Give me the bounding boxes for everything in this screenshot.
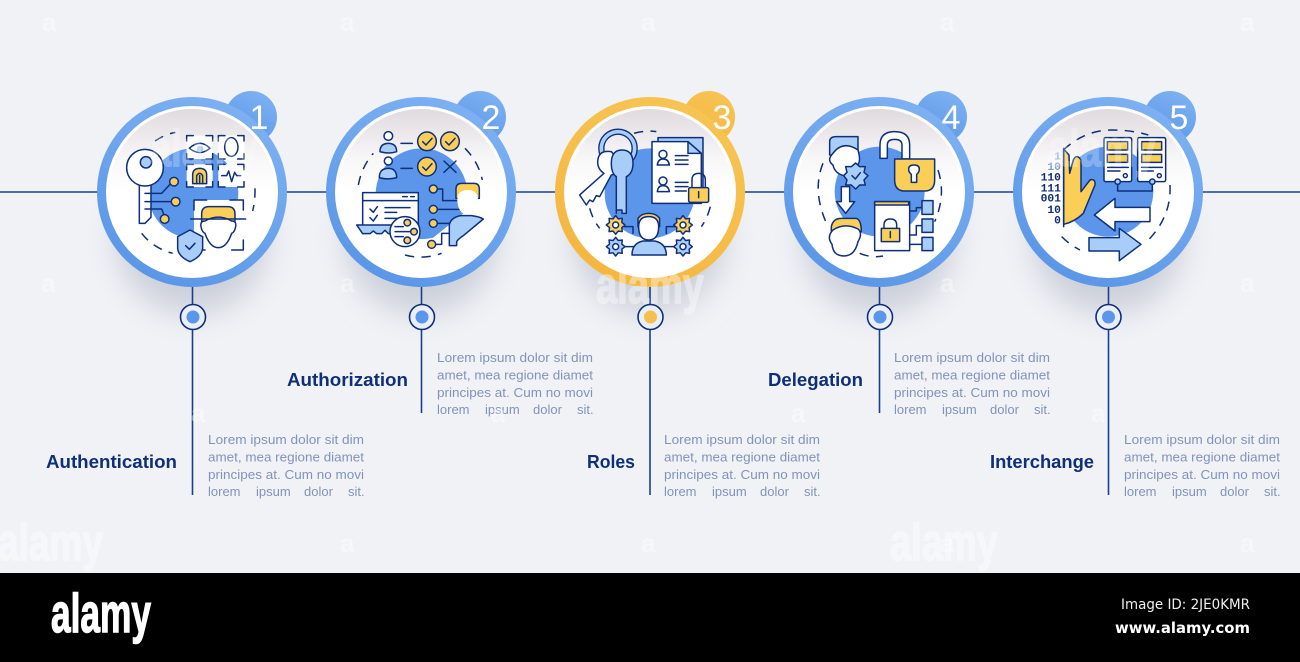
body text 5: sit. [1264, 484, 1281, 499]
body text 3: principes at. Cum no movi [664, 467, 820, 482]
ring 1 [97, 97, 287, 287]
timeline horizontal line [0, 191, 1300, 193]
watermarks: a [641, 528, 656, 558]
watermarks: alamy [1048, 120, 1156, 178]
watermarks: a [1091, 398, 1106, 428]
number 2: 2 [482, 99, 500, 137]
binary digits: 0 [1054, 215, 1061, 227]
body text 2: sit. [577, 402, 594, 417]
body text 1: lorem [208, 484, 241, 499]
watermarks: a [940, 528, 955, 558]
binary digits: 10 [1047, 205, 1061, 217]
body text 4: sit. [1034, 402, 1051, 417]
icon: keys, role document and gears [580, 131, 710, 256]
number 4: 4 [942, 99, 960, 137]
watermarks: alamy [0, 514, 103, 572]
watermarks: alamy [150, 120, 258, 178]
watermarks: alamy [890, 514, 998, 572]
body text 2: Lorem ipsum dolor sit dim [437, 350, 593, 365]
body text 1: dolor [304, 484, 334, 499]
step 4 circle: delegation [784, 91, 974, 287]
body text 3: dolor [760, 484, 790, 499]
badge 2 [454, 91, 506, 143]
watermarks: a [1240, 528, 1255, 558]
body text 5: Lorem ipsum dolor sit dim [1124, 432, 1280, 447]
step 5 circle: interchange [1013, 91, 1203, 287]
body text 4: dolor [990, 402, 1020, 417]
watermarks: a [340, 268, 355, 298]
body text 3: Lorem ipsum dolor sit dim [664, 432, 820, 447]
connector 2 with node [410, 287, 434, 413]
image id: Image ID: 2JE0KMR [1121, 597, 1250, 613]
watermarks: a [1240, 7, 1255, 37]
body text 2: principes at. Cum no movi [437, 385, 593, 400]
watermarks: a [940, 7, 955, 37]
badge 1 [225, 91, 277, 143]
body text 2: dolor [533, 402, 563, 417]
body text 3: sit. [804, 484, 821, 499]
watermarks: a [791, 398, 806, 428]
watermarks: a [41, 268, 56, 298]
heading: Authentication: Authentication [46, 451, 177, 472]
watermarks: a [340, 528, 355, 558]
body text 4: Lorem ipsum dolor sit dim [894, 350, 1050, 365]
icon: delegated access with padlocks [818, 132, 941, 257]
ring 4 [784, 97, 974, 287]
watermarks: a [1240, 268, 1255, 298]
icon: biometric key and face scan [127, 132, 255, 262]
footer bar [0, 573, 1300, 662]
watermarks: a [191, 398, 206, 428]
body text 1: principes at. Cum no movi [208, 467, 364, 482]
icon: permissions checklist and user [357, 132, 483, 257]
circle shadows [116, 162, 1184, 314]
body text 5: dolor [1220, 484, 1250, 499]
icon: data interchange between servers [1041, 130, 1170, 261]
connector 3 with node [638, 287, 663, 495]
connector 5 with node [1096, 287, 1121, 495]
badge 3 [683, 91, 735, 143]
binary digits [1041, 152, 1061, 227]
number 5: 5 [1170, 99, 1188, 137]
body text 1: ipsum [256, 484, 291, 499]
watermarks: a [491, 398, 506, 428]
body text 5: ipsum [1172, 484, 1207, 499]
body text 1: amet, mea regione diamet [208, 450, 364, 464]
heading: Roles: Roles [587, 451, 635, 472]
badge 4 [915, 91, 967, 143]
binary digits: 111 [1041, 184, 1061, 196]
watermarks: a [641, 7, 656, 37]
body text 3: lorem [664, 484, 697, 499]
body text 4: principes at. Cum no movi [894, 385, 1050, 400]
body text 4: ipsum [942, 402, 977, 417]
heading: Delegation: Delegation [768, 369, 863, 390]
body text 4: lorem [894, 402, 927, 417]
body text 5: lorem [1124, 484, 1157, 499]
body text 1: sit. [348, 484, 365, 499]
body text 3: amet, mea regione diamet [664, 450, 820, 464]
number 1: 1 [250, 99, 268, 137]
step 2 circle: authorization [326, 91, 516, 287]
connector 4 with node [868, 287, 892, 413]
binary digits: 10 [1047, 162, 1061, 174]
ring 5 [1013, 97, 1203, 287]
watermarks: alamy [596, 257, 704, 315]
watermarks: a [42, 7, 57, 37]
heading: Authorization: Authorization [287, 369, 408, 390]
website: www.alamy.com [1115, 619, 1250, 637]
number 3: 3 [713, 99, 731, 137]
body text 5: principes at. Cum no movi [1124, 467, 1280, 482]
heading: Interchange: Interchange [990, 451, 1094, 472]
footer logo: alamy [51, 582, 151, 644]
watermarks: a [340, 7, 355, 37]
step 1 circle: authentication [97, 91, 287, 287]
badge 5 [1144, 91, 1196, 143]
binary digits: 110 [1041, 172, 1061, 184]
body text 3: ipsum [712, 484, 747, 499]
body text 2: ipsum [485, 402, 520, 417]
ring 3 [555, 97, 745, 287]
binary digits: 1 [1054, 152, 1061, 164]
ring 2 [326, 97, 516, 287]
body text 5: amet, mea regione diamet [1124, 450, 1280, 464]
body text 2: amet, mea regione diamet [437, 368, 593, 382]
body text 2: lorem [437, 402, 470, 417]
body text 1: Lorem ipsum dolor sit dim [208, 432, 364, 447]
watermarks: a [940, 268, 955, 298]
step 3 circle: roles [555, 91, 745, 287]
binary digits: 001 [1041, 194, 1061, 206]
body text 4: amet, mea regione diamet [894, 368, 1050, 382]
connector 1 with node [180, 287, 206, 495]
